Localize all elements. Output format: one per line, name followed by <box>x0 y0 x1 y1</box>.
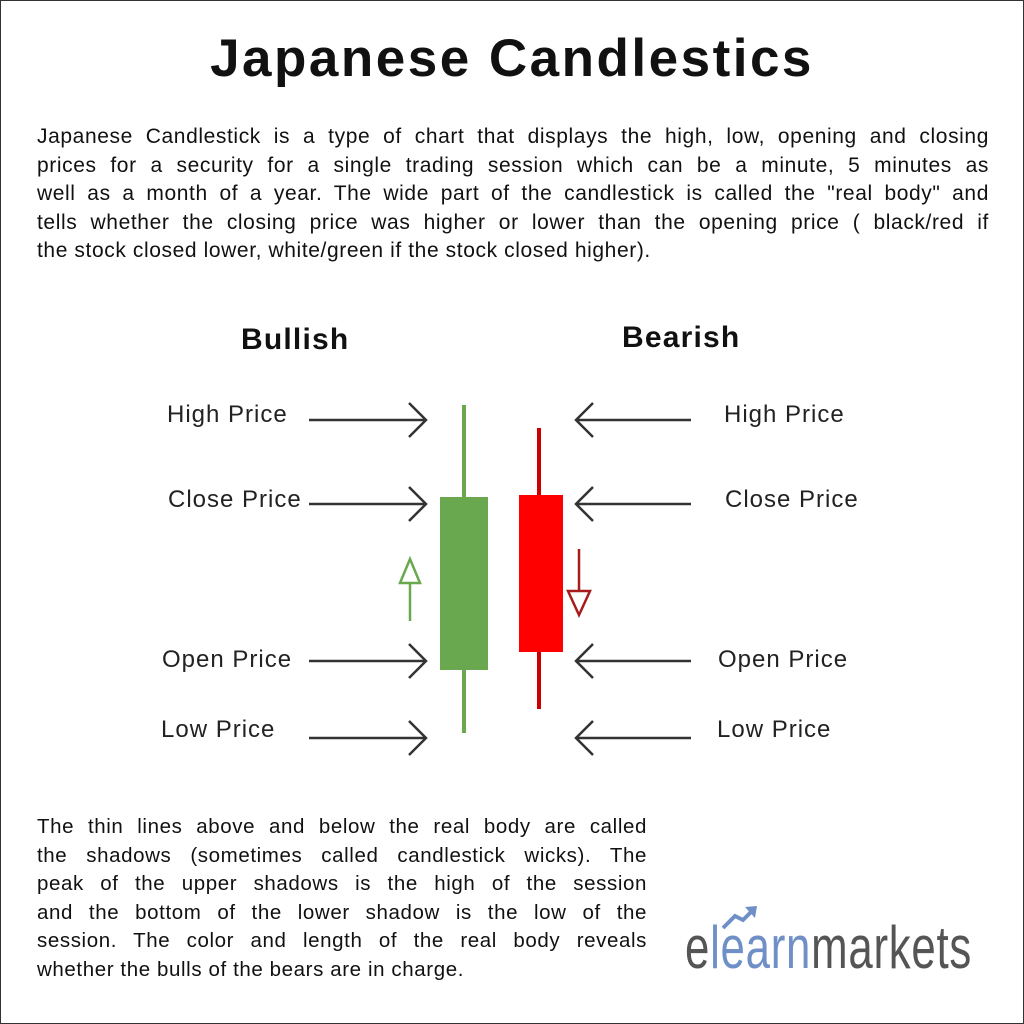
intro text: the stock closed lower, white/green if the stock closed higher). <box>37 239 651 262</box>
bearish candle <box>519 428 563 709</box>
shadows text: and the bottom of the lower shadow is the low of the <box>37 900 647 924</box>
logo: elearnmarkets <box>685 914 972 981</box>
labels bearish: Open Price <box>718 646 848 673</box>
intro text: Japanese Candlestick is a type of chart that displays the high, low, opening and closing <box>37 125 989 148</box>
up arrow <box>400 559 420 621</box>
shadows text <box>37 815 647 980</box>
down arrow <box>568 549 590 615</box>
shadows text: peak of the upper shadows is the high of the session <box>37 872 647 895</box>
arrows left <box>309 403 426 755</box>
intro text: well as a month of a year. The wide part of the candlestick is called the "real body" and <box>37 182 989 205</box>
arrows right <box>576 403 691 755</box>
labels bearish: Low Price <box>717 716 831 743</box>
shadows text: the shadows (sometimes called candlestick wicks). The <box>37 844 647 866</box>
intro text <box>37 125 989 262</box>
bullish candle <box>440 405 488 733</box>
shadows text: whether the bulls of the bears are in charge. <box>37 958 464 980</box>
labels bearish: Close Price <box>725 486 859 513</box>
intro text: tells whether the closing price was higher or lower than the opening price ( black/red if <box>37 211 989 234</box>
labels bullish <box>161 401 302 743</box>
intro text: prices for a security for a single trading session which can be a minute, 5 minutes as <box>37 154 989 177</box>
labels bearish: High Price <box>724 401 845 428</box>
shadows text: session. The color and length of the real body reveals <box>37 929 647 952</box>
heading: bullish: Bullish <box>241 323 349 356</box>
heading: bearish: Bearish <box>622 321 740 354</box>
labels bullish: Close Price <box>168 486 302 513</box>
labels bullish: Low Price <box>161 716 275 743</box>
shadows text: The thin lines above and below the real body are called <box>37 815 647 838</box>
labels bearish <box>717 401 859 743</box>
title: Japanese Candlestics <box>210 29 814 88</box>
labels bullish: Open Price <box>162 646 292 673</box>
labels bullish: High Price <box>167 401 288 428</box>
